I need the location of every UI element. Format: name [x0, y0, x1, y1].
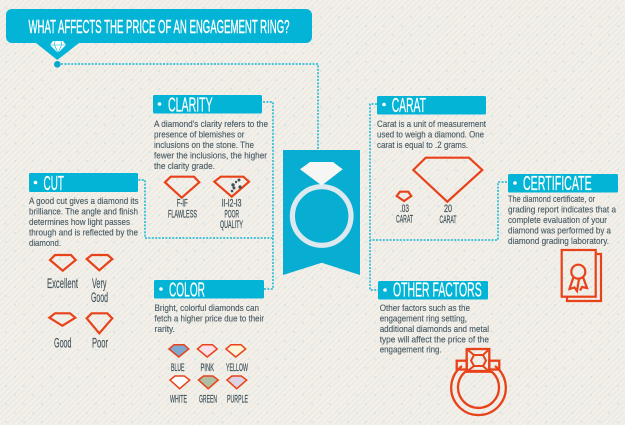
label: poor quality: POOR [224, 208, 239, 220]
panel: other factors [378, 279, 506, 415]
cut text [29, 196, 139, 248]
panel: color: BLUE [171, 362, 184, 374]
icon: small carat diamond [397, 192, 411, 201]
icon: ring with setting [451, 349, 506, 415]
carat text [377, 119, 487, 150]
clarity heading: CLARITY [168, 94, 213, 117]
label: pink: PINK [200, 362, 214, 374]
certificate text [508, 194, 616, 246]
panel: color: YELLOW [226, 362, 248, 374]
icon: poor cut [87, 313, 112, 333]
label: excellent: Excellent [47, 276, 78, 291]
label: very good: Very [92, 276, 107, 291]
label: flawless [168, 198, 197, 221]
color heading: COLOR [169, 279, 205, 302]
central ribbon with ring [283, 150, 360, 275]
panel: color: GREEN [199, 394, 217, 406]
panel: clarity: FLAWLESS [168, 209, 197, 221]
color text [154, 303, 264, 334]
cut text: brilliance. The angle and finish [29, 206, 138, 216]
other factors text: type will affect the price of the [380, 334, 489, 344]
label: 20 carat: 20 [444, 203, 452, 215]
panel: carat: CARAT [440, 214, 457, 226]
icon: blue diamond [169, 345, 189, 357]
other factors text: Other factors such as the [380, 303, 470, 313]
clarity text [154, 119, 268, 171]
icon: purple diamond [227, 376, 247, 389]
cut text: diamond. [29, 238, 61, 248]
icon: certificate [562, 250, 601, 301]
icon: excellent cut [50, 255, 76, 271]
label: poor quality [220, 198, 243, 231]
certificate text: grading report indicates that a [508, 204, 616, 214]
clarity text: fewer the inclusions, the higher [154, 150, 267, 160]
icon: flawless diamond [165, 177, 199, 198]
icon: yellow diamond [226, 345, 246, 357]
icon: pink diamond [198, 345, 217, 357]
icon: very good cut [87, 255, 112, 270]
certificate text: complete evaluation of your [508, 215, 607, 225]
icon: title diamond [50, 41, 66, 53]
clarity text: the clarity grade. [154, 161, 215, 171]
cut text: through and is reflected by the [29, 228, 138, 238]
panel: color: PURPLE [227, 394, 248, 406]
cut heading: CUT [44, 172, 64, 195]
panel: carat: CARAT [396, 213, 413, 225]
cut heading [29, 172, 138, 195]
clarity text: inclusions on the stone. The [154, 140, 254, 150]
certificate text: diamond was performed by a [508, 226, 611, 236]
icon: white diamond [170, 376, 190, 389]
carat heading: CARAT [392, 94, 426, 117]
icon: large carat diamond [413, 158, 482, 202]
panel: color [154, 279, 264, 406]
connector lines [61, 64, 507, 290]
color text: Bright, colorful diamonds can [154, 303, 259, 313]
carat text: Carat is a unit of measurement [377, 119, 487, 129]
label: very good [91, 276, 108, 305]
icon: green diamond [198, 376, 218, 389]
icon: good cut [49, 313, 75, 326]
panel: color: WHITE [170, 394, 187, 406]
color text: rarity. [154, 324, 175, 334]
icon: included diamond [214, 177, 249, 197]
clarity text: presence of blemishes or [154, 130, 245, 140]
carat text: used to weigh a diamond. One [377, 130, 484, 140]
panel: clarity: QUALITY [220, 219, 243, 231]
panel: cut [29, 172, 139, 351]
certificate text: The diamond certificate, or [508, 194, 595, 204]
panel: certificate [508, 172, 618, 301]
color text: fetch a higher price due to their [154, 314, 264, 324]
title banner [6, 9, 312, 60]
label: very good: Good [91, 290, 108, 305]
cut text: determines how light passes [29, 217, 131, 227]
label: .03 carat [396, 203, 413, 225]
title connector dot [54, 61, 61, 68]
cut text: A good cut gives a diamond its [29, 196, 139, 206]
other factors text: engagement ring setting, [380, 314, 467, 324]
label: good: Good [54, 336, 72, 351]
certificate text: diamond grading laboratory. [508, 236, 609, 246]
other factors text [380, 303, 489, 354]
icon: ring band [292, 187, 351, 245]
panel: clarity [153, 94, 268, 231]
other factors text: additional diamonds and metal [380, 324, 489, 334]
title: WHAT AFFECTS THE PRICE OF AN ENGAGEMENT RING? [28, 16, 290, 37]
carat text: carat is equal to .2 grams. [377, 140, 468, 150]
icon: ring diamond [300, 162, 343, 186]
label: poor: Poor [92, 336, 108, 351]
label: 20 carat [440, 203, 457, 226]
label: poor quality: II-I2-I3 [222, 198, 242, 210]
other factors text: engagement ring. [380, 344, 442, 354]
panel: carat [377, 94, 487, 226]
clarity text: A diamond's clarity refers to the [154, 119, 268, 129]
other factors heading: OTHER FACTORS [393, 279, 482, 302]
label: .03 carat: .03 [400, 203, 409, 215]
label: flawless: F-IF [177, 198, 188, 210]
